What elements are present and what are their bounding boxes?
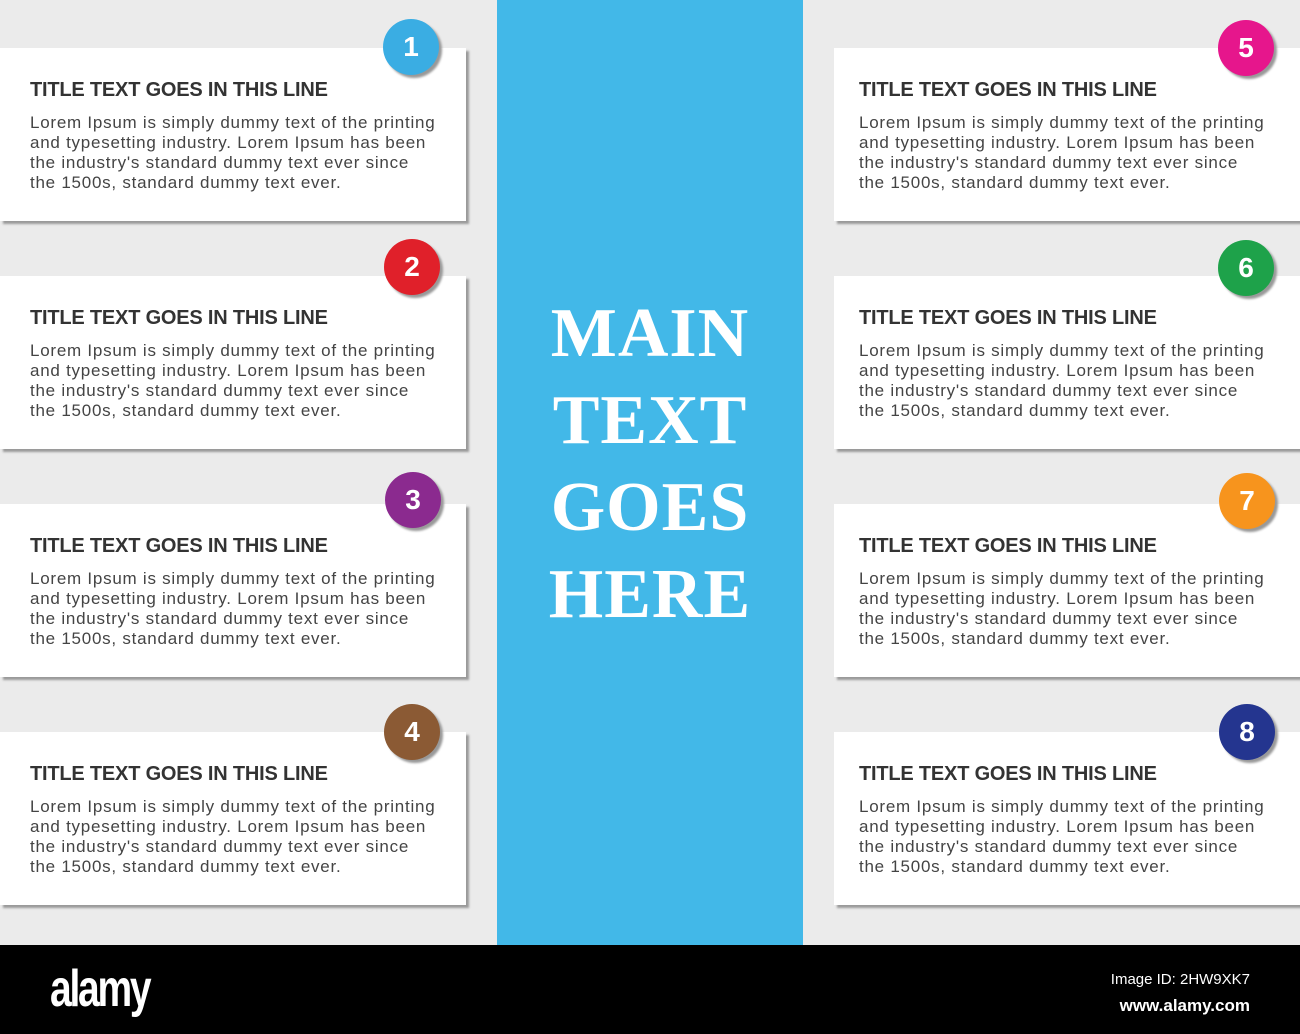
card 5: and typesetting industry. Lorem Ipsum has been xyxy=(859,133,1255,152)
badge 6 xyxy=(1218,240,1274,296)
card 4: the industry's standard dummy text ever since xyxy=(30,837,409,856)
card 1: Lorem Ipsum is simply dummy text of the printing xyxy=(30,113,435,132)
card 1: the 1500s, standard dummy text ever. xyxy=(30,173,341,192)
badge 2 xyxy=(384,239,440,295)
badge 4 xyxy=(384,704,440,760)
card 2: the 1500s, standard dummy text ever. xyxy=(30,401,341,420)
card 2: TITLE TEXT GOES IN THIS LINE xyxy=(30,307,328,329)
badge 2: 2 xyxy=(404,251,420,282)
card 7: and typesetting industry. Lorem Ipsum has been xyxy=(859,589,1255,608)
badge 7: 7 xyxy=(1239,485,1255,516)
card 5: the 1500s, standard dummy text ever. xyxy=(859,173,1170,192)
main title: HERE xyxy=(549,556,751,633)
main title: TEXT xyxy=(553,382,747,459)
footer bar xyxy=(0,945,1300,1034)
card 4: and typesetting industry. Lorem Ipsum has been xyxy=(30,817,426,836)
card 7 xyxy=(834,504,1300,677)
card 4: the 1500s, standard dummy text ever. xyxy=(30,857,341,876)
card 4: Lorem Ipsum is simply dummy text of the printing xyxy=(30,797,435,816)
card 7: TITLE TEXT GOES IN THIS LINE xyxy=(859,535,1157,557)
card 3: Lorem Ipsum is simply dummy text of the printing xyxy=(30,569,435,588)
badge 7 xyxy=(1219,473,1275,529)
card 3: the 1500s, standard dummy text ever. xyxy=(30,629,341,648)
badge 1 xyxy=(383,19,439,75)
card 8: and typesetting industry. Lorem Ipsum has been xyxy=(859,817,1255,836)
card 8 xyxy=(834,732,1300,905)
image id: www.alamy.com xyxy=(1120,996,1250,1015)
card 5: TITLE TEXT GOES IN THIS LINE xyxy=(859,79,1157,101)
card 3: and typesetting industry. Lorem Ipsum has been xyxy=(30,589,426,608)
card 6: Lorem Ipsum is simply dummy text of the printing xyxy=(859,341,1264,360)
badge 6: 6 xyxy=(1238,252,1254,283)
card 4 xyxy=(0,732,466,905)
card 6: the 1500s, standard dummy text ever. xyxy=(859,401,1170,420)
card 6: and typesetting industry. Lorem Ipsum has been xyxy=(859,361,1255,380)
image id xyxy=(1111,971,1250,1015)
card 2: and typesetting industry. Lorem Ipsum has been xyxy=(30,361,426,380)
card 6: the industry's standard dummy text ever since xyxy=(859,381,1238,400)
panel: center column xyxy=(497,0,803,945)
card 7: the 1500s, standard dummy text ever. xyxy=(859,629,1170,648)
card 1: and typesetting industry. Lorem Ipsum has been xyxy=(30,133,426,152)
card 7: the industry's standard dummy text ever since xyxy=(859,609,1238,628)
card 3: TITLE TEXT GOES IN THIS LINE xyxy=(30,535,328,557)
card 2: the industry's standard dummy text ever since xyxy=(30,381,409,400)
card 3: the industry's standard dummy text ever since xyxy=(30,609,409,628)
card 8: the 1500s, standard dummy text ever. xyxy=(859,857,1170,876)
main title xyxy=(549,295,751,633)
card 2 xyxy=(0,276,466,449)
main title: MAIN xyxy=(551,295,749,372)
card 6: TITLE TEXT GOES IN THIS LINE xyxy=(859,307,1157,329)
card 5 xyxy=(834,48,1300,221)
card 5: Lorem Ipsum is simply dummy text of the printing xyxy=(859,113,1264,132)
image id: Image ID: 2HW9XK7 xyxy=(1111,971,1250,988)
card 3 xyxy=(0,504,466,677)
card 8: TITLE TEXT GOES IN THIS LINE xyxy=(859,763,1157,785)
main title: GOES xyxy=(551,469,749,546)
badge 5 xyxy=(1218,20,1274,76)
card 5: the industry's standard dummy text ever since xyxy=(859,153,1238,172)
badge 8: 8 xyxy=(1239,716,1255,747)
card 1: the industry's standard dummy text ever since xyxy=(30,153,409,172)
card 1: TITLE TEXT GOES IN THIS LINE xyxy=(30,79,328,101)
card 8: the industry's standard dummy text ever since xyxy=(859,837,1238,856)
card 4: TITLE TEXT GOES IN THIS LINE xyxy=(30,763,328,785)
logo: alamy xyxy=(50,960,149,1018)
badge 3 xyxy=(385,472,441,528)
badge 1: 1 xyxy=(403,31,419,62)
card 8: Lorem Ipsum is simply dummy text of the printing xyxy=(859,797,1264,816)
card 1 xyxy=(0,48,466,221)
card 6 xyxy=(834,276,1300,449)
card 2: Lorem Ipsum is simply dummy text of the printing xyxy=(30,341,435,360)
badge 3: 3 xyxy=(405,484,421,515)
badge 8 xyxy=(1219,704,1275,760)
badge 4: 4 xyxy=(404,716,420,747)
badge 5: 5 xyxy=(1238,32,1254,63)
card 7: Lorem Ipsum is simply dummy text of the printing xyxy=(859,569,1264,588)
